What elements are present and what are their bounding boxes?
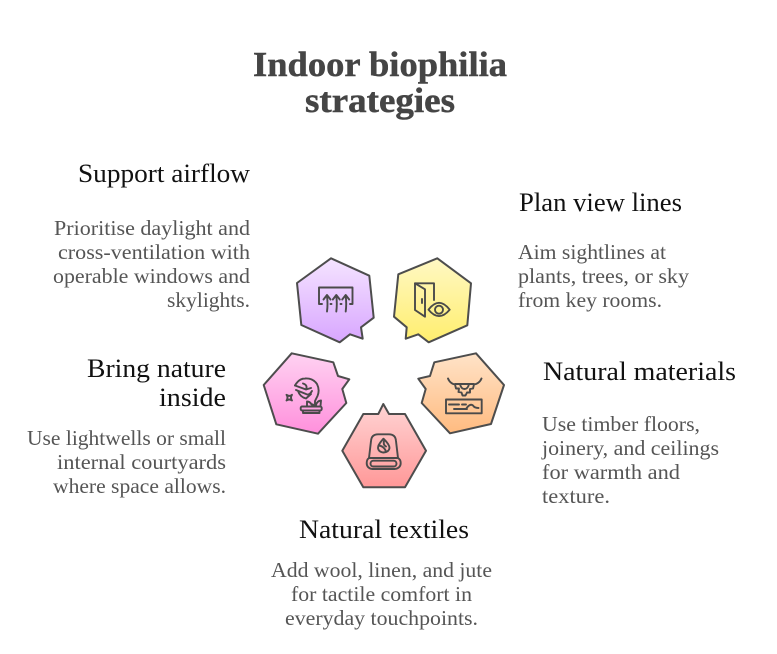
panel: natural materials text: [541, 356, 736, 508]
heading: natural materials: Natural materials: [543, 356, 736, 386]
panel: natural textiles text: [271, 514, 492, 630]
text block: plan view lines body: [518, 240, 689, 312]
heading: natural textiles: Natural textiles: [299, 514, 469, 544]
text block: plan view lines body: from key rooms.: [518, 288, 662, 312]
text block: support airflow body: skylights.: [167, 288, 250, 312]
text block: natural textiles body: Add wool, linen, and jute: [271, 558, 492, 582]
text block: bring nature inside body: where space allows.: [53, 474, 226, 498]
panel: plan view lines text: [518, 187, 689, 312]
text block: support airflow body: operable windows and: [53, 264, 250, 288]
heading: bring nature inside: [87, 353, 226, 412]
text block: natural textiles body: [271, 558, 492, 630]
text block: bring nature inside body: internal courtyards: [57, 450, 226, 474]
panel: bring nature inside text: [27, 353, 226, 498]
heading: bring nature inside: inside: [159, 382, 226, 412]
panel: red hexagon textiles: [342, 404, 426, 487]
panel: pink hexagon nature: [264, 353, 349, 434]
panel: yellow hexagon view lines: [394, 258, 471, 342]
text block: natural materials body: for warmth and: [542, 460, 680, 484]
heading: plan view lines: Plan view lines: [519, 187, 682, 217]
text block: plan view lines body: Aim sightlines at: [518, 240, 666, 264]
text block: support airflow body: cross-ventilation with: [58, 240, 250, 264]
heading: bring nature inside: Bring nature: [87, 353, 226, 383]
title: [253, 45, 507, 120]
panel: support airflow text: [53, 158, 251, 312]
icon: door and eye: [415, 283, 450, 317]
text block: support airflow body: Prioritise daylight and: [54, 216, 250, 240]
text block: bring nature inside body: Use lightwells or small: [27, 426, 226, 450]
text block: natural textiles body: for tactile comfort in: [291, 582, 472, 606]
icon: air vent with arrows: [319, 288, 352, 312]
icon: timber and ceiling: [446, 378, 482, 413]
text block: natural textiles body: everyday touchpoints.: [285, 606, 478, 630]
text block: bring nature inside body: [27, 426, 226, 498]
title: strategies: [305, 81, 455, 120]
title: Indoor biophilia: [253, 45, 507, 84]
text block: natural materials body: Use timber floors,: [542, 412, 700, 436]
panel: orange hexagon materials: [418, 353, 504, 433]
heading: support airflow: Support airflow: [78, 158, 251, 188]
text block: natural materials body: joinery, and ceilings: [541, 436, 719, 460]
panel: purple hexagon airflow: [297, 258, 374, 342]
text block: plan view lines body: plants, trees, or sky: [518, 264, 689, 288]
text block: support airflow body: [53, 216, 250, 312]
text block: natural materials body: texture.: [542, 484, 610, 508]
icon: indoor plant: [286, 378, 322, 413]
text block: natural materials body: [541, 412, 719, 508]
icon: folded textile with droplet: [367, 434, 401, 469]
